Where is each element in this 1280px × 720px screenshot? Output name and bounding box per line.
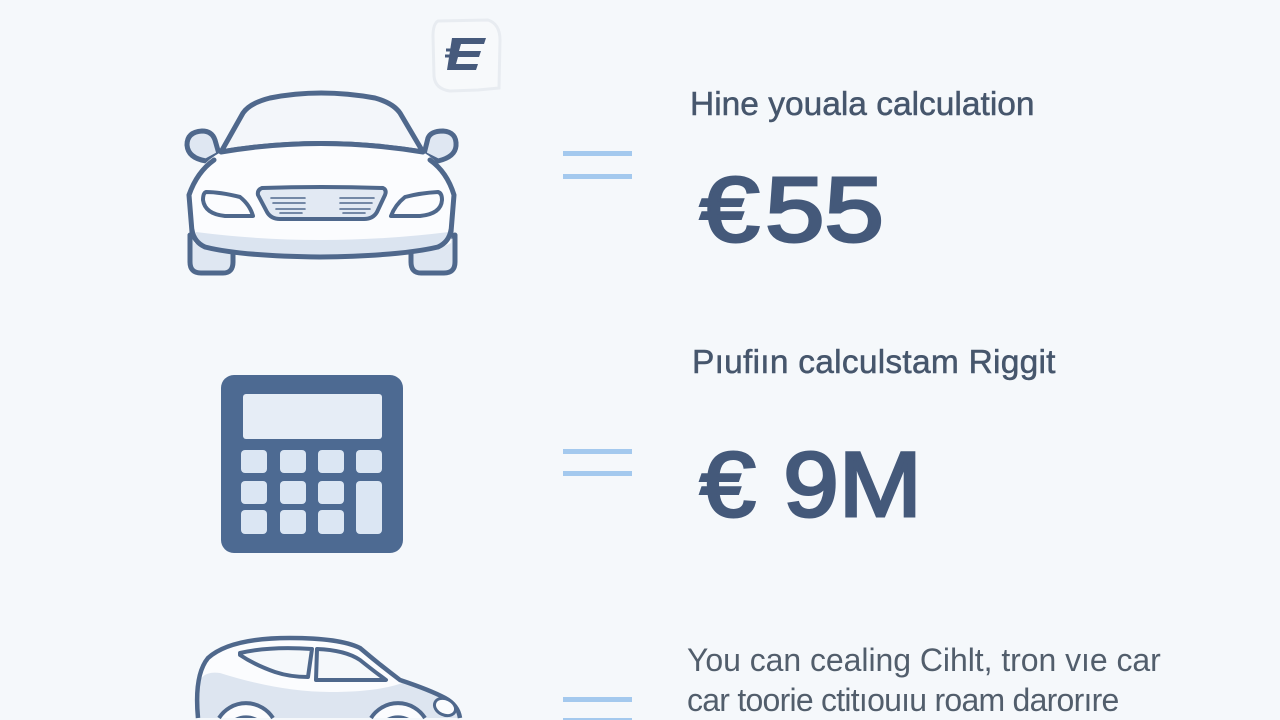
icon: front car [187,93,456,273]
heading 2: Pıufiın calculstam Riggit [692,344,1056,381]
icon: side car [194,636,462,720]
equals sign 3 [563,697,632,720]
heading 1: Hine youala calculation [690,86,1035,123]
icon: front car with euro bubble [184,18,502,276]
value 2: € 9M [700,434,922,536]
value 1: €55 [700,159,884,261]
equals sign 1 [563,151,632,179]
icon: euro speech bubble [433,20,500,91]
equals sign 2 [563,449,632,476]
icon: calculator [221,375,403,553]
paragraph [687,642,1161,718]
paragraph: car toorie ctitıouıu roam darorıre [687,682,1119,718]
paragraph: You can cealing Cihlt, tron vıe car [687,642,1161,678]
